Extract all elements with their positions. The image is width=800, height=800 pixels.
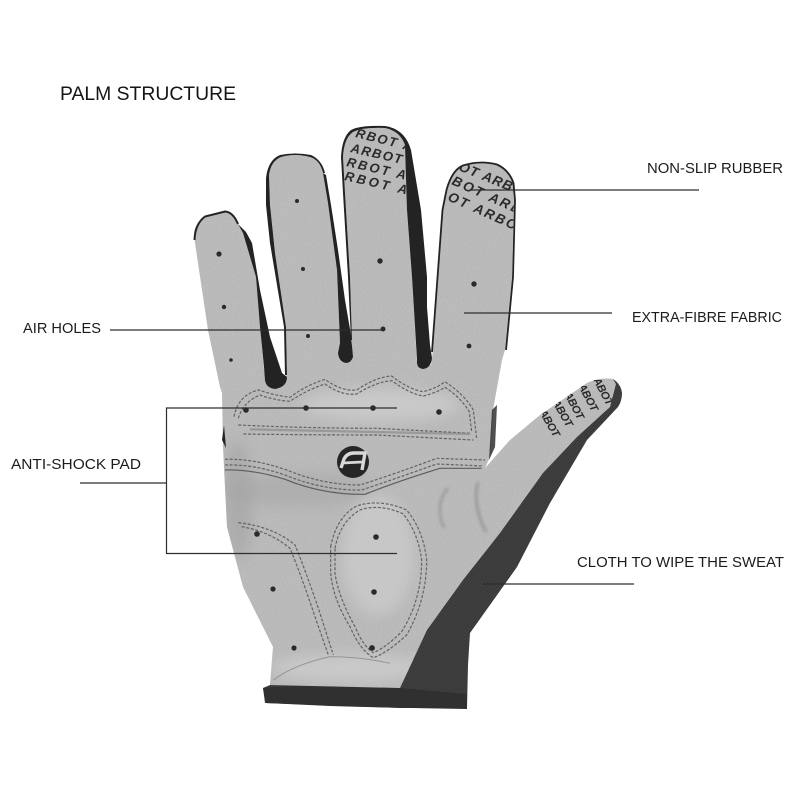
middle finger edge and dark side (341, 126, 432, 369)
title: PALM STRUCTURE (60, 84, 236, 105)
callout: cloth to wipe the sweat: CLOTH TO WIPE THE SWEAT (577, 555, 784, 571)
pinky dark side (238, 224, 287, 389)
ARBOT print: index finger: OT ARBOT (446, 189, 530, 238)
ring finger dark side (323, 173, 353, 363)
ARBOT print: index finger: BOT ARB (450, 173, 524, 217)
ARBOT print: middle finger: RBOT A (354, 125, 414, 154)
index finger outline (432, 162, 515, 352)
ARBOT print: thumb: ABOT (536, 407, 562, 441)
ARBOT print: middle finger: ARBOT A (348, 140, 419, 170)
logo badge (337, 446, 369, 478)
callout: anti-shock pad (11, 408, 397, 554)
ARBOT print: thumb: ABOT (561, 389, 587, 423)
ARBOT print: thumb: ABOT (575, 381, 601, 415)
glove back fabric: thumb side and cuff (263, 379, 622, 709)
stitching: pads (225, 376, 485, 680)
finger side fabric (222, 126, 497, 460)
ARBOT print: index finger: OT ARBO (457, 159, 526, 198)
ARBOT print: thumb (542, 380, 612, 436)
callout: air holes: AIR HOLES (23, 321, 101, 337)
palm edge slivers (489, 405, 497, 460)
air holes (216, 199, 477, 651)
ARBOT print: thumb: ABOT (590, 375, 616, 409)
ARBOT print: index finger (448, 164, 514, 228)
ring finger left and top edge (266, 154, 325, 375)
callout: non-slip rubber: NON-SLIP RUBBER (647, 161, 783, 177)
palm surface (194, 128, 616, 688)
pinky top edge (194, 212, 238, 240)
glove illustration (194, 125, 622, 709)
ARBOT print: middle finger (344, 129, 406, 194)
ARBOT print: middle finger: RBOT AR (343, 168, 421, 200)
ARBOT print: thumb: ABOT (549, 397, 575, 431)
callout: anti-shock pad: ANTI-SHOCK PAD (11, 457, 141, 473)
ARBOT print: middle finger: RBOT AR (345, 154, 419, 185)
callout: extra-fibre fabric: EXTRA-FIBRE FABRIC (632, 310, 782, 326)
palm shading (224, 389, 486, 682)
